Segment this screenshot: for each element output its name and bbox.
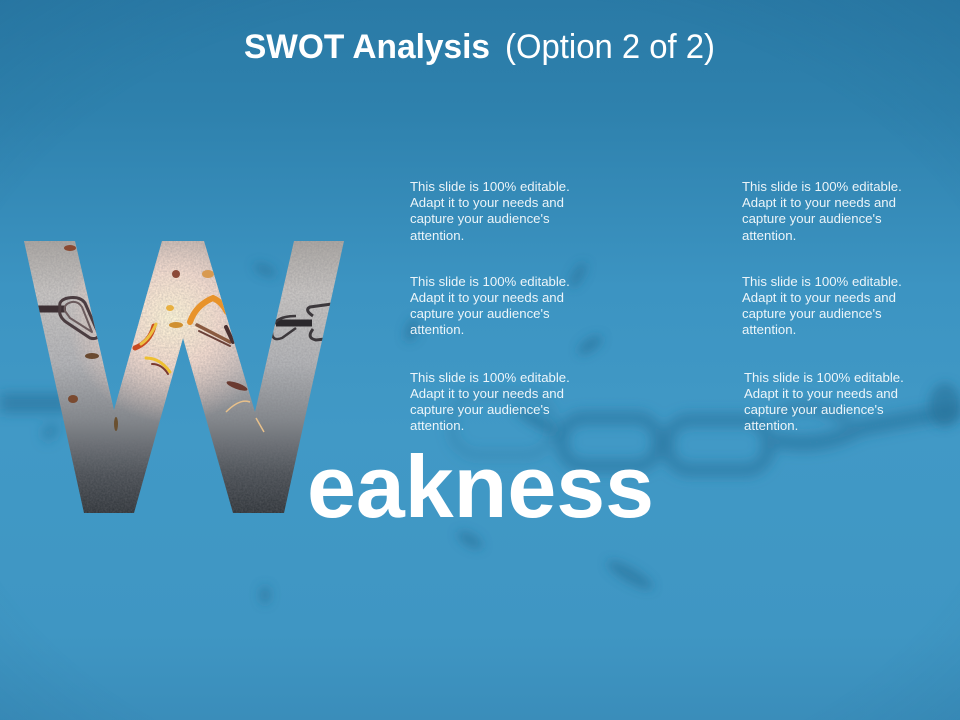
text block: left 2: capture your audience's (410, 306, 550, 321)
text block: right 1: This slide is 100% editable. (742, 179, 902, 194)
text block: left 2: Adapt it to your needs and (410, 290, 564, 305)
text block: right 2: Adapt it to your needs and (742, 290, 896, 305)
text block: right 3: Adapt it to your needs and (744, 386, 898, 401)
text block: left 2: This slide is 100% editable. (410, 274, 570, 289)
text block: left 2: attention. (410, 322, 464, 337)
text block: right 1: attention. (742, 228, 796, 243)
text block: right 3: This slide is 100% editable. (744, 370, 904, 385)
text block: left 1: Adapt it to your needs and (410, 195, 564, 210)
icon: sparks and link fragments (64, 245, 264, 432)
icon: burning chain links (135, 298, 233, 374)
text block: right 2: This slide is 100% editable. (742, 274, 902, 289)
text block: right 3: attention. (744, 418, 798, 433)
word remainder: eakness: eakness (307, 437, 654, 536)
icon: right chain links (272, 304, 334, 340)
title (244, 28, 715, 66)
letter W with chain photo (20, 238, 350, 516)
text block: right 3: capture your audience's (744, 402, 884, 417)
text block: left 3: Adapt it to your needs and (410, 386, 564, 401)
text block: left 1: attention. (410, 228, 464, 243)
text block: right 2: capture your audience's (742, 306, 882, 321)
text block: right 1: Adapt it to your needs and (742, 195, 896, 210)
text block: right 1: capture your audience's (742, 211, 882, 226)
text block: left 1: This slide is 100% editable. (410, 179, 570, 194)
text block: left 3: This slide is 100% editable. (410, 370, 570, 385)
title: SWOT Analysis (244, 28, 490, 66)
text block: left 3: capture your audience's (410, 402, 550, 417)
text block: left 1: capture your audience's (410, 211, 550, 226)
icon: left chain links (36, 298, 99, 339)
text block: right 2: attention. (742, 322, 796, 337)
title: (Option 2 of 2) (505, 28, 715, 66)
text block: left 3: attention. (410, 418, 464, 433)
